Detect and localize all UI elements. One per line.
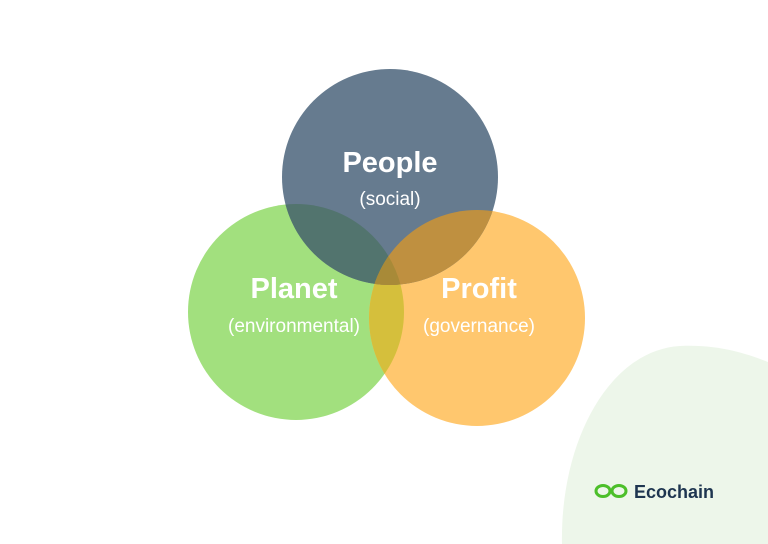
logo: Ecochain [596,482,714,502]
label: profit: Profit [441,273,517,305]
label: planet: (environmental) [228,316,360,337]
label: profit: (governance) [423,316,535,337]
label: planet [228,273,360,337]
logo: Ecochain: Ecochain [634,482,714,502]
overlap: people/planet [286,204,399,285]
label: people: (social) [359,189,421,210]
overlap: people/profit [374,210,492,285]
background blob [562,346,768,544]
overlap: center [374,256,400,285]
overlap: planet/profit [369,284,404,374]
circle: planet [188,204,404,420]
label: profit [423,273,535,337]
circle: people [282,69,498,285]
label: planet: Planet [250,273,338,305]
label: people: People [342,147,438,179]
label: people [342,147,438,210]
venn diagram [188,69,768,544]
circle: profit [369,210,585,426]
